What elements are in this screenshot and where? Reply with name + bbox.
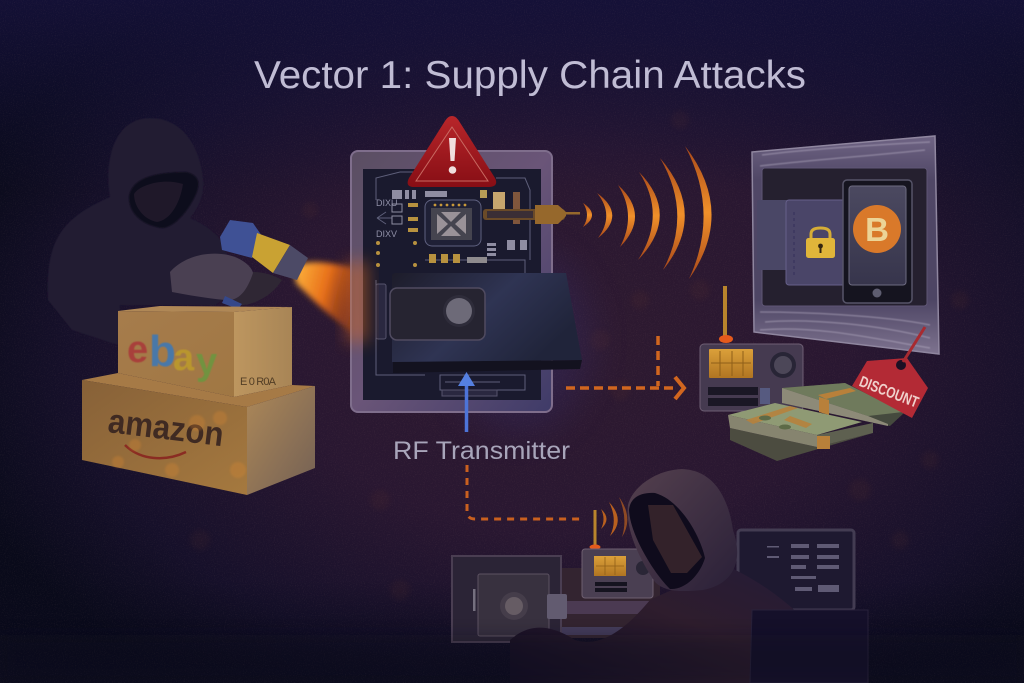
board traces	[376, 172, 530, 390]
board components	[392, 190, 527, 256]
compromised hardware device	[346, 116, 582, 412]
ebay logo: e	[127, 329, 148, 371]
operator radio	[582, 510, 653, 598]
operator mask	[648, 505, 702, 573]
heat gun	[220, 220, 364, 340]
bottom vignette	[0, 635, 1024, 683]
dashed arrow to resale goods	[566, 336, 684, 399]
device glow	[450, 250, 590, 430]
wallet flap	[390, 288, 485, 340]
discount text: DISCOUNT	[857, 373, 921, 412]
ebay box label: E 0 R0A	[240, 376, 277, 388]
safe door	[478, 574, 549, 636]
wallet	[390, 273, 582, 373]
antenna base glow	[719, 335, 733, 343]
ebay logo	[127, 327, 217, 383]
radio keypad	[709, 349, 753, 378]
discount tag	[852, 327, 928, 418]
device frame	[351, 151, 552, 412]
safe probe	[547, 594, 567, 619]
lower cash stack	[728, 403, 873, 461]
rf transmitter label: RF Transmitter	[393, 437, 570, 465]
ebay box	[118, 306, 292, 397]
radio grille	[708, 387, 758, 406]
rf probe	[483, 205, 580, 224]
operator body	[510, 560, 805, 683]
gun nozzle	[273, 245, 308, 280]
front dark stand	[750, 610, 868, 683]
top cash stack	[782, 383, 905, 426]
hooded attacker with heat gun	[48, 118, 282, 345]
microchip	[425, 200, 481, 246]
attacker mask	[134, 182, 183, 222]
gun yellow barrel	[252, 233, 290, 273]
plastic wrap	[752, 136, 939, 354]
phone home button	[872, 288, 882, 298]
exclamation mark	[449, 138, 456, 161]
hooded operator	[510, 469, 805, 683]
wallet clasp button	[443, 295, 475, 327]
cash stacks	[728, 383, 905, 461]
dashed link from transmitter to operator	[467, 465, 580, 519]
operator face opening	[629, 493, 705, 589]
ebay logo: b	[149, 327, 176, 376]
flame jet	[294, 262, 364, 340]
operator workstation	[452, 497, 854, 642]
safe	[452, 556, 567, 642]
phone with bitcoin: B	[865, 211, 889, 248]
padlock	[806, 228, 835, 258]
circuit board	[363, 169, 541, 400]
title: Vector 1: Supply Chain Attacks	[254, 54, 806, 97]
board print text: DIXU	[376, 198, 398, 208]
left wallet section	[757, 200, 797, 270]
side slot and lower contacts	[376, 284, 497, 396]
operator hood	[628, 469, 737, 591]
second gloved hand	[222, 272, 282, 305]
radio body	[700, 344, 803, 411]
ebay logo: a	[173, 337, 195, 379]
bag inner tray	[762, 168, 927, 306]
attacker hood opening	[129, 172, 198, 228]
amazon logo: amazon	[106, 402, 226, 454]
compromised hardware device: DIXV	[376, 229, 397, 239]
amazon box	[82, 373, 315, 495]
gun grip	[222, 296, 242, 309]
resealed tamper bag	[752, 136, 939, 354]
bitcoin coin	[853, 205, 901, 253]
antenna	[723, 286, 727, 340]
monitor	[738, 530, 854, 610]
operator radio waves	[601, 497, 627, 537]
safe dial	[500, 592, 528, 620]
plastic highlights	[760, 142, 930, 348]
wallet with padlock	[786, 200, 846, 285]
radio transmitter	[700, 286, 803, 411]
gun rear body	[220, 220, 262, 258]
signal waves	[583, 146, 712, 279]
radio knob	[770, 352, 796, 378]
ebay logo: y	[196, 341, 217, 383]
blue arrow to wallet	[458, 372, 475, 432]
amazon smile	[125, 445, 186, 458]
warning triangle	[408, 116, 496, 187]
attacker body	[48, 118, 238, 345]
flame glow on device edge	[346, 262, 368, 342]
desk	[560, 568, 660, 638]
phone with bitcoin	[843, 180, 912, 303]
warm bokeh	[112, 411, 246, 478]
gloved hand	[170, 254, 253, 300]
